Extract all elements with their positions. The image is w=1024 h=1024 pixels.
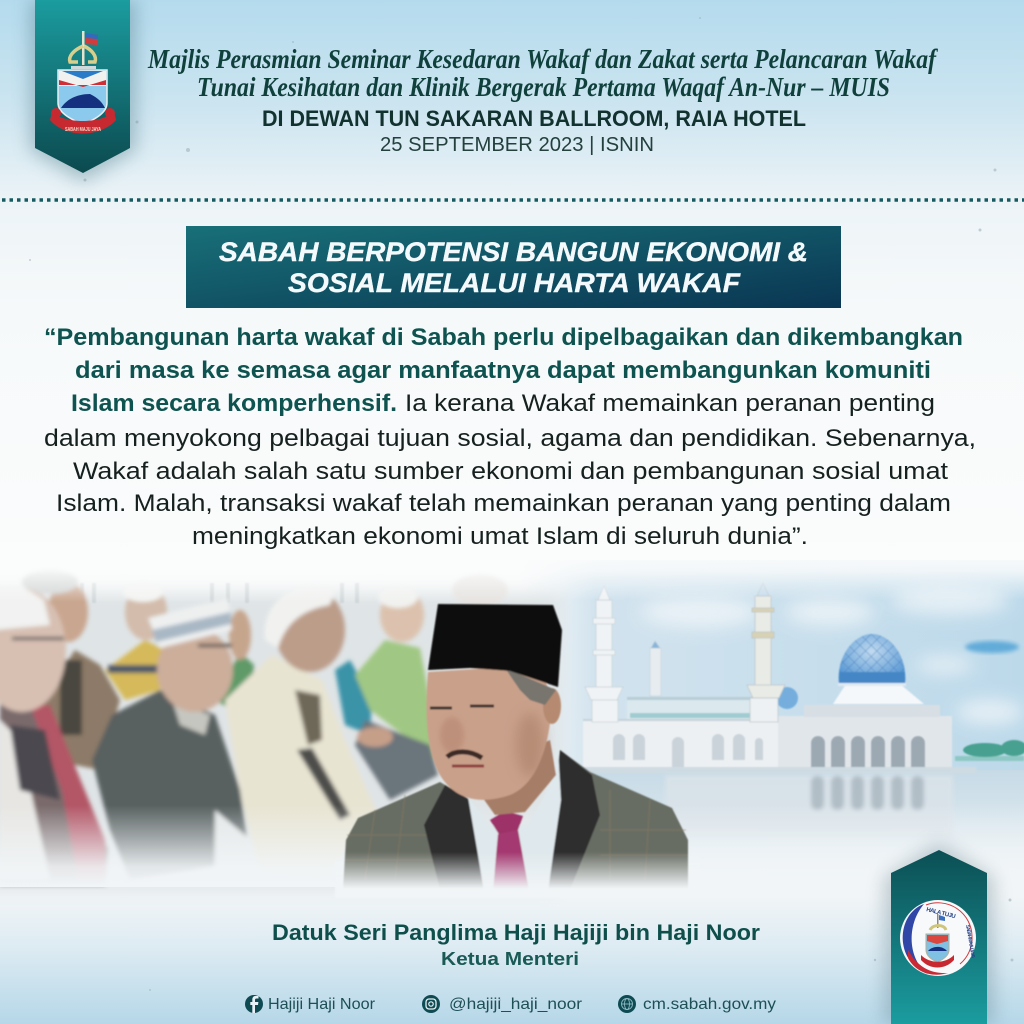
quote text block: dari masa ke semasa agar manfaatnya dapat membangunkan komuniti: [75, 357, 931, 384]
bottom fade: [0, 805, 1024, 887]
right minaret: [747, 583, 785, 722]
headline banner: [186, 226, 841, 308]
bottom ribbon with logo: [884, 842, 994, 1024]
top fade: [0, 552, 560, 602]
man in green shirt: [355, 586, 438, 800]
left minaret: [585, 586, 623, 722]
quote text block: dalam menyokong pelbagai tujuan sosial, agama dan pendidikan. Sebenarnya,: [44, 425, 976, 452]
arches: [811, 736, 925, 767]
jacket: [343, 750, 688, 890]
neck and face: [426, 665, 556, 815]
main hall: [583, 705, 952, 768]
teal shirt man: [335, 660, 372, 735]
quote text block: Ia kerana Wakaf memainkan peranan penting: [405, 390, 935, 417]
title script text: Tunai Kesihatan dan Klinik Bergerak Pertama Waqaf An-Nur – MUIS: [197, 72, 890, 102]
songkok: [428, 604, 562, 687]
ribbon: [891, 850, 987, 1024]
hair: [505, 668, 556, 705]
left wing roof terrace: [627, 697, 753, 720]
eyes: [430, 706, 494, 708]
social: instagram: @hajiji_haji_noor: [449, 996, 583, 1013]
icon: Sabah crest: [50, 31, 116, 134]
mosque dome base: [833, 684, 924, 704]
social: facebook: Hajiji Haji Noor: [268, 996, 376, 1013]
back man brown jacket: [22, 570, 120, 770]
ribbon: [35, 0, 130, 173]
left man plaid shirt: [0, 586, 108, 885]
man in cream shirt: [225, 586, 378, 880]
ear: [543, 688, 561, 724]
speaker role: Ketua Menteri: [441, 949, 579, 969]
mosque: [583, 583, 976, 773]
title script text: [147, 44, 939, 102]
icon: Hala Tuju Sabah Maju Jaya logo: [900, 900, 976, 976]
green patterned man: [215, 610, 254, 720]
quote text block: Wakaf adalah salah satu sumber ekonomi dan pembangunan sosial umat: [73, 458, 948, 485]
small minaret: [650, 641, 661, 696]
wall windows: [80, 583, 359, 603]
icon: Sabah crest: SABAH MAJU JAYA: [65, 127, 101, 133]
small windows: [613, 734, 763, 767]
headline banner: SABAH BERPOTENSI BANGUN EKONOMI &: [219, 237, 808, 267]
embankment: [583, 767, 976, 773]
panel: photo band: [0, 552, 1024, 898]
back man yellow stripe: [105, 582, 167, 700]
sky behind mosque: [520, 560, 1024, 775]
palm trees: [955, 740, 1024, 761]
ribbon shadow: [30, 0, 136, 182]
date line: 25 SEPTEMBER 2023 | ISNIN: [380, 134, 654, 156]
suit lapels: [424, 750, 600, 890]
speaker name: Datuk Seri Panglima Haji Hajiji bin Haji Noor: [272, 920, 760, 945]
blue sky patch: [965, 641, 1019, 653]
mosque reflection: [665, 775, 953, 837]
social: website: cm.sabah.gov.my: [643, 996, 776, 1013]
speaker portrait: [343, 604, 688, 890]
top ribbon with crest: [30, 0, 136, 182]
top fade right: [560, 552, 1024, 600]
water: [560, 770, 1024, 880]
quote text block: [44, 324, 976, 550]
man in dark shirt: [92, 598, 300, 880]
title script text: Majlis Perasmian Seminar Kesedaran Wakaf dan Zakat serta Pelancaran Wakaf: [147, 44, 939, 74]
shirt: [468, 748, 561, 890]
headline banner: SOSIAL MELALUI HARTA WAKAF: [288, 268, 742, 298]
main dome: [838, 634, 906, 686]
suit check pattern: [345, 790, 688, 880]
quote text block: Islam. Malah, transaksi wakaf telah memainkan peranan yang penting dalam: [56, 490, 951, 517]
ribbon shadow: [884, 842, 994, 1024]
icon: Hala Tuju Sabah Maju Jaya logo: HALA TUJU: [926, 907, 956, 920]
quote text block: Islam secara komperhensif.: [71, 390, 397, 417]
necktie: [490, 811, 529, 890]
crowd background wall: [0, 590, 560, 890]
clouds: [640, 586, 1024, 724]
quote text block: meningkatkan ekonomi umat Islam di seluruh dunia”.: [192, 523, 808, 550]
speaker fade: [335, 852, 700, 898]
moustache and lips: [447, 752, 484, 766]
small dome: [776, 687, 798, 709]
quote text block: “Pembangunan harta wakaf di Sabah perlu dipelbagaikan dan dikembangkan: [44, 324, 963, 351]
crowd photo: [0, 570, 508, 885]
venue line: DI DEWAN TUN SAKARAN BALLROOM, RAIA HOTEL: [262, 106, 806, 131]
dotted divider: [2, 198, 1024, 202]
background head centre: [452, 574, 508, 606]
icon: Hala Tuju Sabah Maju Jaya logo: SABAH MAJU JAYA: [964, 924, 976, 959]
